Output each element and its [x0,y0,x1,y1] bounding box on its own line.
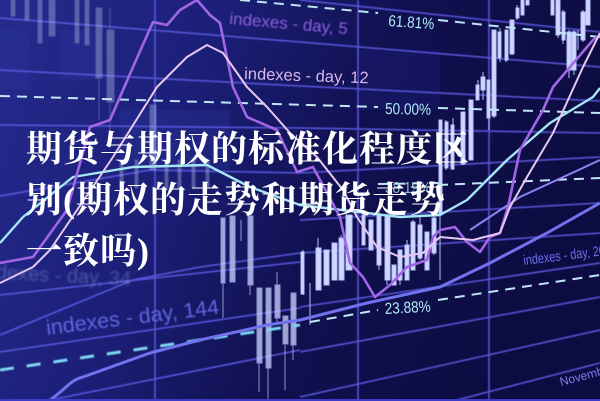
label 38.19%: 38.19% [385,180,431,197]
curve: pink day 12 [0,33,600,283]
label 61.81%: 61.81% [388,13,435,33]
label day 144: indexes - day, 144 [45,295,220,340]
title: 期货与期权的标准化程度区别(期权的走势和期货走势一致吗) [26,129,470,271]
curve: thick blue day 200 [50,203,600,400]
faded column bands [0,30,440,170]
label day 5: indexes - day, 5 [229,9,349,38]
label 50.00%: 50.00% [385,101,431,119]
curve: purple day 5 [0,0,600,297]
label 23.88%: 23.88% [384,299,431,318]
bright candles [301,0,590,325]
bottom edge [0,399,600,401]
percentage labels [384,13,435,318]
curve: lower purple [470,160,600,230]
label day 12: indexes - day, 12 [244,65,369,87]
curve: cyan dome [0,88,600,243]
faded candles left [11,0,209,188]
mid candles [221,216,296,400]
